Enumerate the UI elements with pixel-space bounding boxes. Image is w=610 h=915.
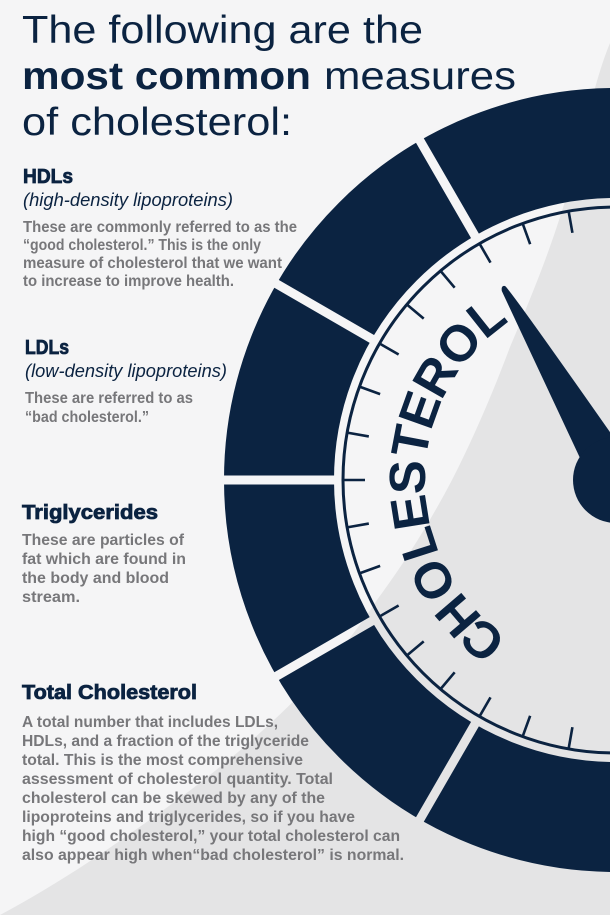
gauge: curved label: T — [380, 421, 442, 462]
text block: Triglycerides: fat which are found in — [22, 551, 186, 568]
gauge: curved label — [379, 285, 516, 674]
gauge: curved label: R — [401, 346, 469, 407]
text block: Total Cholesterol: lipoproteins and triglycerides, so if you have — [22, 809, 355, 826]
title: The following are the — [22, 9, 423, 52]
text block: Total Cholesterol: high “good cholesterol,” your total cholesterol can — [22, 828, 400, 845]
text block: HDLs: “good cholesterol.” This is the only — [23, 237, 261, 254]
text block: Triglycerides: Triglycerides — [22, 501, 158, 524]
text block: Total Cholesterol: total. This is the most comprehensive — [22, 752, 303, 769]
title: of cholesterol: — [22, 101, 292, 144]
text block: Total Cholesterol: assessment of cholesterol quantity. Total — [22, 771, 333, 788]
text block: HDLs: measure of cholesterol that we want — [23, 255, 282, 272]
gauge: curved label: E — [379, 491, 441, 534]
text block: Triglycerides: These are particles of — [22, 532, 185, 549]
gauge: curved label: O — [399, 549, 468, 611]
text block: Total Cholesterol: A total number that includes LDLs, — [22, 714, 278, 731]
text block: Total Cholesterol — [22, 681, 404, 864]
text block: Triglycerides: the body and blood — [22, 570, 169, 587]
text block: Total Cholesterol: HDLs, and a fraction of the triglyceride — [22, 733, 309, 750]
gauge: curved label: O — [424, 310, 493, 377]
title: measures — [324, 55, 516, 98]
title — [22, 9, 516, 144]
title: most common — [22, 55, 311, 98]
text block: LDLs — [25, 336, 227, 426]
text block: HDLs — [23, 165, 297, 290]
gauge: curved label: H — [424, 583, 491, 648]
text block: LDLs: (low-density lipoproteins) — [25, 361, 227, 381]
gauge: curved label: L — [456, 285, 516, 349]
gauge: curved label: E — [387, 384, 452, 435]
gauge: tick marks — [343, 211, 572, 749]
text block: Triglycerides — [22, 501, 186, 606]
gauge: curved label: L — [386, 521, 450, 568]
gauge: thin inner ring — [343, 207, 610, 753]
text block: HDLs: These are commonly referred to as the — [23, 219, 297, 236]
text block: Total Cholesterol: Total Cholesterol — [22, 681, 197, 704]
gauge: curved label: S — [379, 460, 436, 495]
text block: Total Cholesterol: cholesterol can be skewed by any of the — [22, 790, 325, 807]
text block: LDLs: These are referred to as — [25, 390, 193, 407]
text block: HDLs: (high-density lipoproteins) — [23, 190, 233, 210]
gauge: segmented outer ring — [279, 143, 610, 817]
text block: HDLs: HDLs — [23, 165, 73, 188]
gauge: needle — [502, 286, 610, 523]
text block: Triglycerides: stream. — [22, 589, 80, 606]
text block: HDLs: to increase to improve health. — [23, 273, 234, 290]
text block: Total Cholesterol: also appear high when“bad cholesterol” is normal. — [22, 847, 404, 864]
gauge: curved label: C — [450, 606, 515, 674]
text block: LDLs: LDLs — [25, 336, 69, 359]
text block: LDLs: “bad cholesterol.” — [25, 409, 149, 426]
